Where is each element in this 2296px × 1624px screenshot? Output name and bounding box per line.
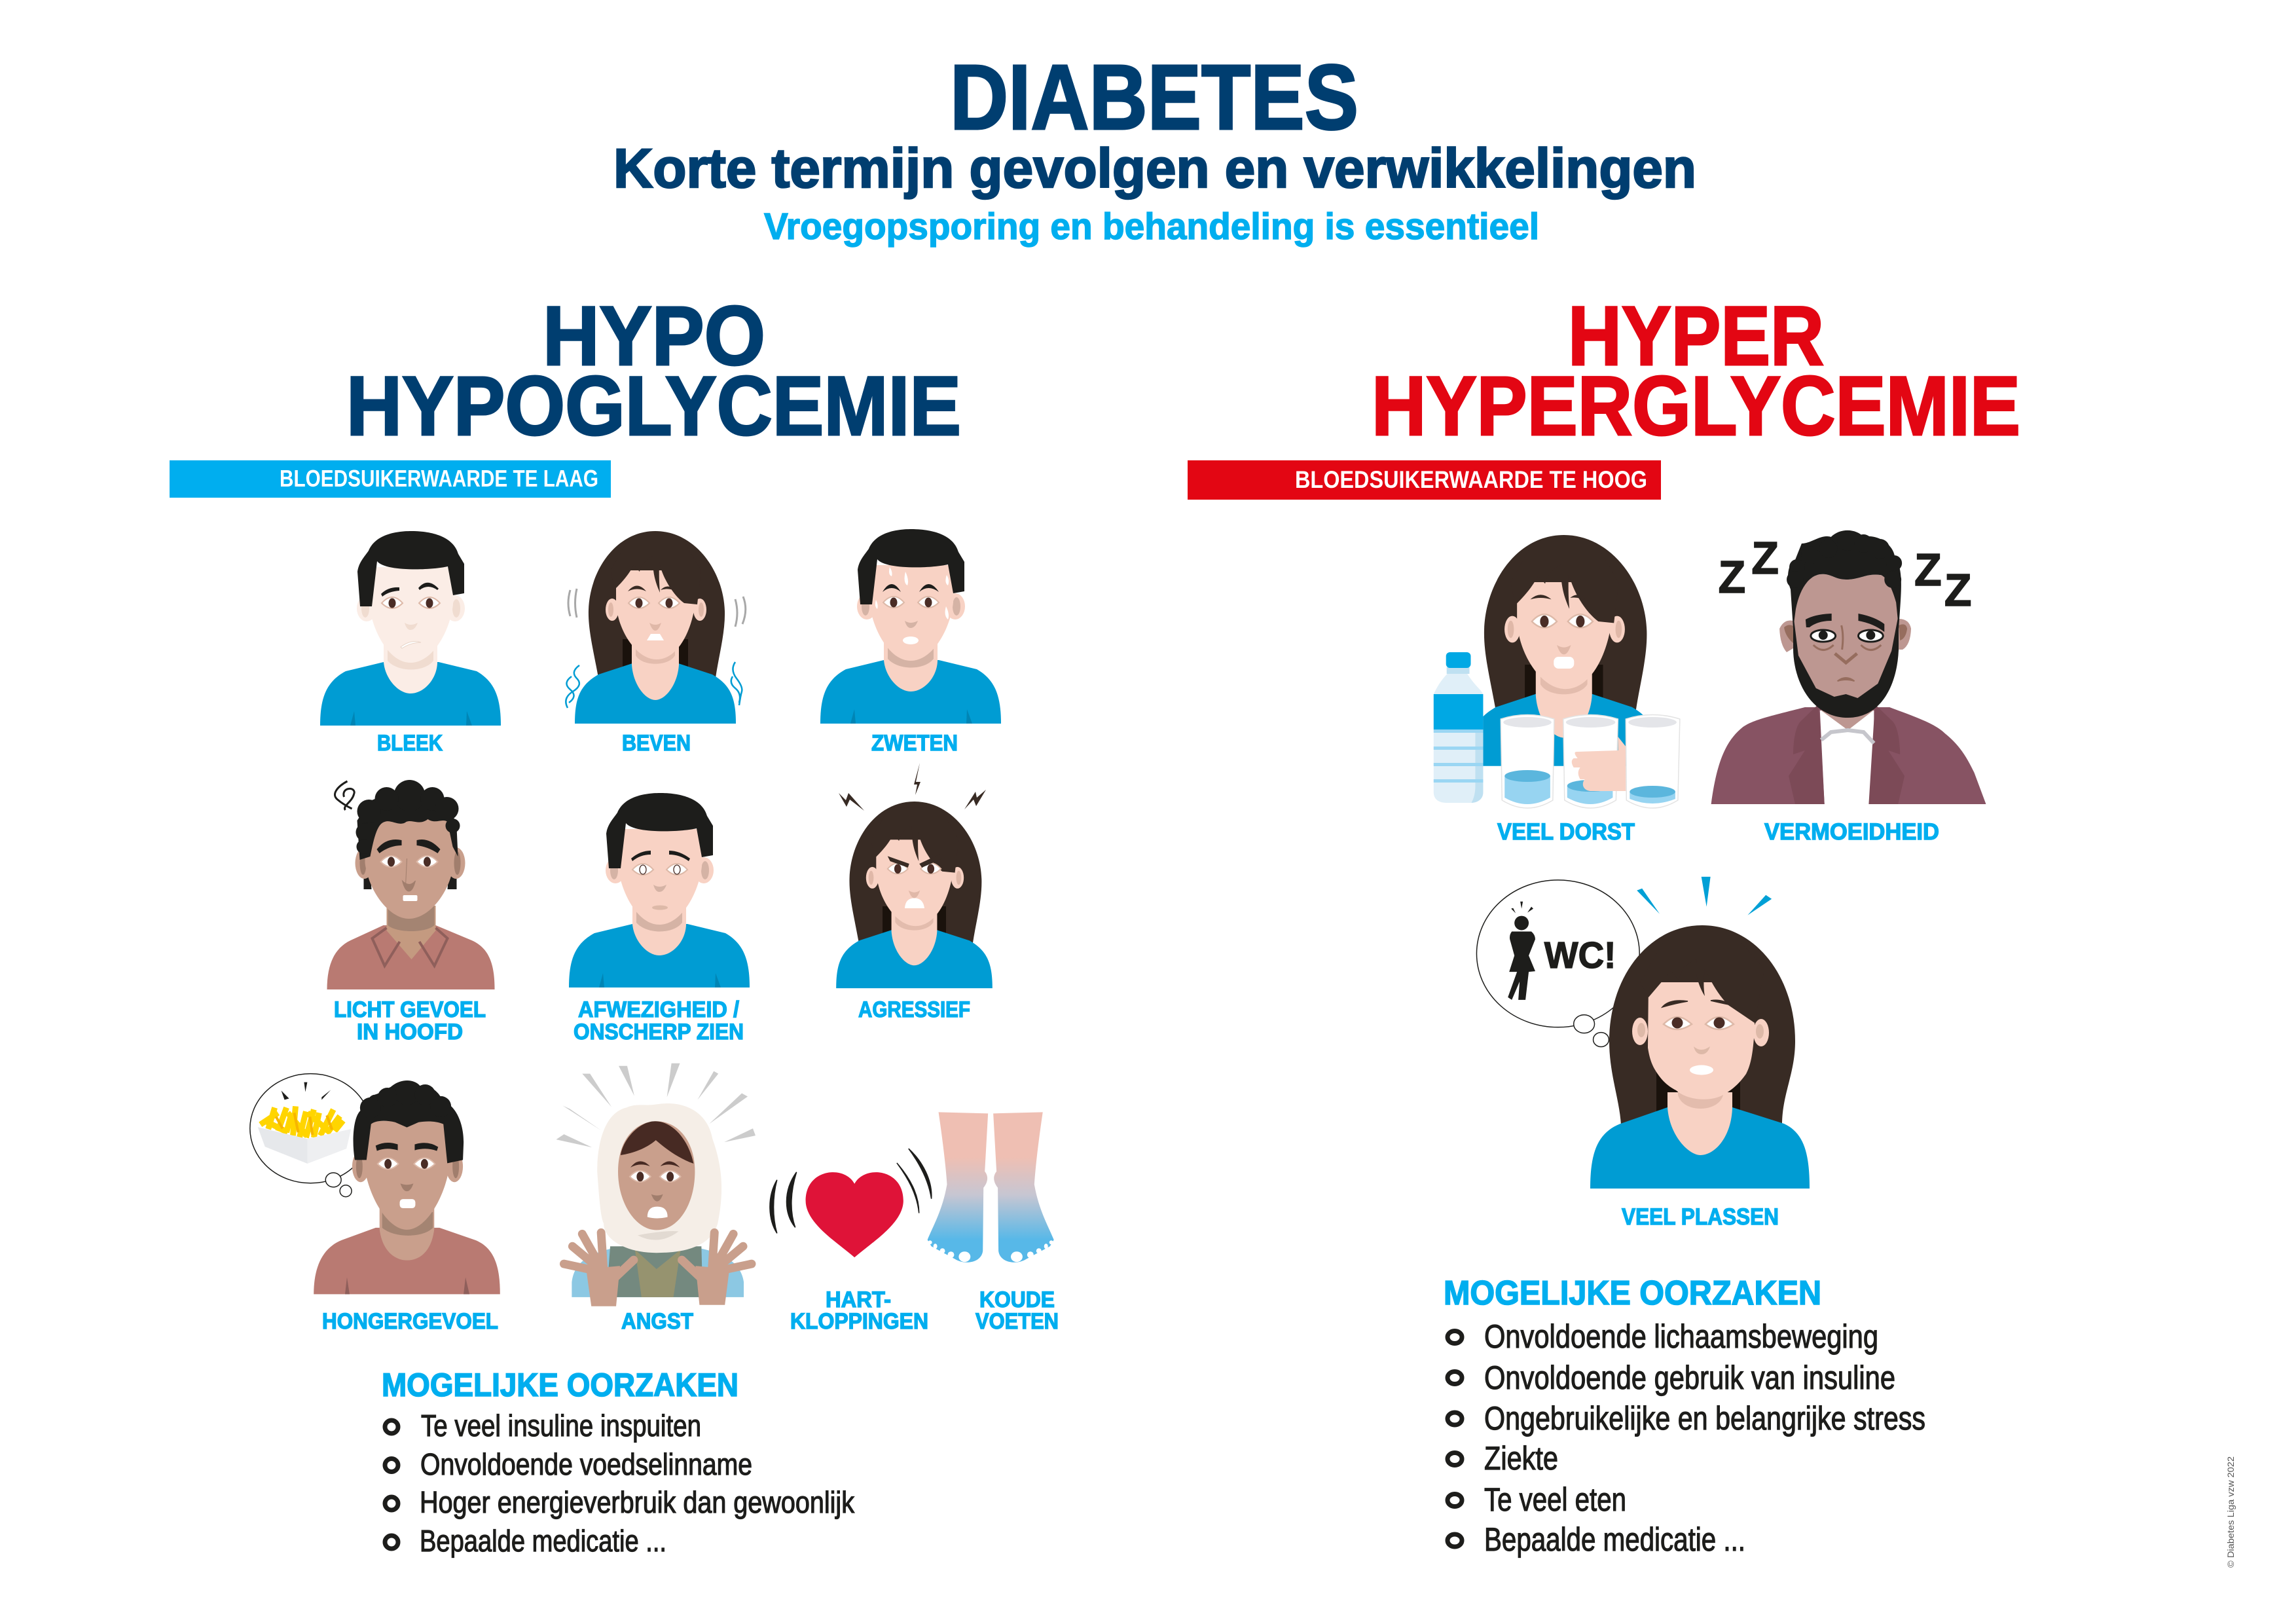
banner: bloedsuikerwaarde te laag: [170, 460, 611, 498]
icon: licht gevoel in hoofd: [327, 780, 495, 989]
label: vermoeidheid: VERMOEIDHEID: [1764, 819, 1939, 845]
heading: mogelijke oorzaken: MOGELIJKE OORZAKEN: [1444, 1274, 1821, 1312]
label: zweten: ZWETEN: [871, 731, 958, 756]
subtitle: Korte termijn gevolgen en verwikkelingen: [613, 138, 1696, 199]
list: hyper causes: Bepaalde medicatie ...: [1484, 1521, 1745, 1558]
icon: thought bubble fries: [250, 1074, 371, 1197]
label: hartkloppingen: [790, 1287, 928, 1334]
title: DIABETES: [950, 45, 1358, 149]
label: bleek: BLEEK: [377, 731, 443, 756]
icon: hongergevoel: [314, 1080, 500, 1294]
banner: bloedsuikerwaarde te hoog: BLOEDSUIKERWAARDE TE HOOG: [1295, 466, 1647, 493]
list: hyper causes: Ziekte: [1484, 1440, 1558, 1477]
label: koude voeten: KOUDE: [979, 1287, 1055, 1312]
icon: glass 3: [1626, 715, 1680, 808]
label: hartkloppingen: HART-: [826, 1287, 891, 1312]
list: hypo causes: Onvoldoende voedselinname: [420, 1447, 752, 1481]
icon: vermoeidheid: [1711, 530, 1986, 804]
label: hartkloppingen: KLOPPINGEN: [790, 1309, 928, 1334]
panel: hyper causes: [1444, 1274, 1925, 1558]
list: hypo causes: Te veel insuline inspuiten: [421, 1409, 701, 1443]
icon: glass 1: [1501, 715, 1554, 808]
text: wc: WC!: [1544, 935, 1616, 976]
icon: thought bubble wc: [1476, 880, 1639, 1047]
list: hyper causes: Ongebruikelijke en belangrijke stress: [1484, 1400, 1925, 1437]
heading: HYPO: HYPO: [543, 289, 765, 383]
icon: veel plassen person: [1590, 925, 1810, 1189]
icon: koude voeten: [928, 1112, 1054, 1263]
icon: hartkloppingen: [770, 1149, 932, 1257]
list: hyper causes: Onvoldoende lichaamsbeweging: [1484, 1318, 1878, 1355]
banner: bloedsuikerwaarde te hoog: [1188, 460, 1661, 500]
label: afwezigheid / onscherp zien: AFWEZIGHEID /: [578, 997, 740, 1022]
icon: afwezigheid: [569, 793, 750, 987]
label: koude voeten: VOETEN: [975, 1309, 1059, 1334]
icon: agressief: [836, 802, 993, 988]
icon: glass 2 with hand: [1563, 715, 1626, 808]
list: hypo causes: [385, 1409, 855, 1558]
icon: angst: [556, 1063, 756, 1306]
icon: sleep letters: [1719, 532, 1972, 616]
icon: sleep letters: Z: [1944, 564, 1972, 616]
icon: person needing toilet: [1508, 902, 1535, 1000]
icon: sleep letters: Z: [1914, 544, 1942, 595]
heading: HYPER: HYPER: [1568, 289, 1824, 383]
icon: lightning bolts: [839, 763, 986, 811]
icon: bottle: [1434, 652, 1483, 803]
banner: bloedsuikerwaarde te laag: BLOEDSUIKERWAARDE TE LAAG: [280, 465, 598, 492]
label: agressief: AGRESSIEF: [858, 997, 970, 1022]
label: hongergevoel: HONGERGEVOEL: [322, 1309, 498, 1334]
list: hypo causes: Bepaalde medicatie ...: [420, 1524, 666, 1558]
label: afwezigheid / onscherp zien: ONSCHERP ZIEN: [574, 1020, 744, 1044]
panel: hypo causes: [382, 1367, 855, 1558]
tagline: Vroegopsporing en behandeling is essentieel: [764, 206, 1539, 248]
icon: sleep letters: Z: [1719, 551, 1745, 602]
icon: beven: [566, 531, 746, 724]
copyright: © Diabetes Liga vzw 2022: [2225, 1456, 2236, 1568]
list: hyper causes: Onvoldoende gebruik van insuline: [1484, 1359, 1895, 1396]
label: licht gevoel in hoofd: IN HOOFD: [357, 1020, 463, 1044]
heading: mogelijke oorzaken: MOGELIJKE OORZAKEN: [382, 1367, 738, 1403]
label: afwezigheid / onscherp zien: [574, 997, 744, 1044]
label: veel plassen: VEEL PLASSEN: [1622, 1204, 1779, 1230]
icon: glasses and bottle: [1434, 652, 1680, 808]
label: beven: BEVEN: [622, 731, 691, 756]
icon: veel dorst person: [1484, 535, 1647, 766]
label: veel dorst: VEEL DORST: [1497, 819, 1635, 845]
heading: HYPOGLYCEMIE: HYPOGLYCEMIE: [346, 360, 961, 453]
heading: HYPERGLYCEMIE: HYPERGLYCEMIE: [1372, 360, 2020, 453]
icon: alert spikes: [1637, 877, 1772, 915]
label: licht gevoel in hoofd: LICHT GEVOEL: [334, 997, 486, 1022]
label: licht gevoel in hoofd: [334, 997, 486, 1044]
label: koude voeten: [975, 1287, 1059, 1334]
list: hyper causes: Te veel eten: [1484, 1481, 1626, 1518]
list: hyper causes: [1448, 1318, 1925, 1558]
icon: sleep letters: Z: [1751, 532, 1779, 583]
label: angst: ANGST: [621, 1309, 693, 1334]
icon: bleek: [320, 531, 501, 726]
list: hypo causes: Hoger energieverbruik dan gewoonlijk: [420, 1485, 855, 1519]
icon: zweten: [820, 529, 1001, 724]
